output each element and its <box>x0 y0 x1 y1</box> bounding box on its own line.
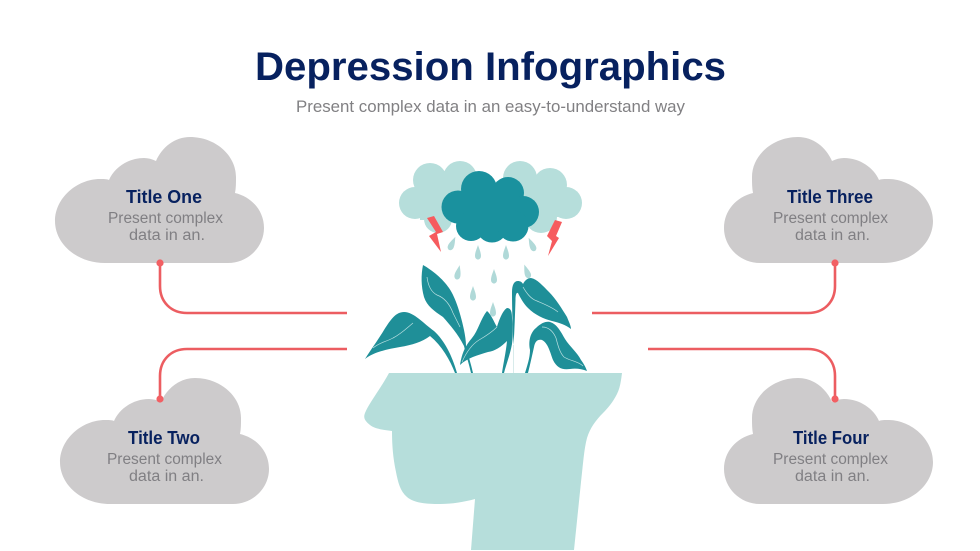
text: Title Two description: Present complex <box>107 451 222 468</box>
panel: Title One cloud <box>55 137 264 263</box>
icon: light storm cloud right <box>503 161 582 233</box>
subtitle: Present complex data in an easy-to-understand way <box>296 97 685 116</box>
text: Title Two description: data in an. <box>129 468 204 485</box>
heading: Title Four: Title Four <box>793 428 869 448</box>
leaf 5 <box>525 322 587 373</box>
icon: light storm cloud left <box>399 161 477 233</box>
title: Depression Infographics <box>255 45 726 89</box>
text: Title Four description <box>773 451 888 485</box>
icon: rain drops <box>446 235 538 317</box>
icon: lightning right <box>547 220 562 256</box>
text: Title Two description <box>107 451 222 485</box>
connector: Title Three <box>592 259 839 313</box>
icon: lightning left <box>427 216 443 252</box>
heading: Title One: Title One <box>126 187 202 207</box>
leaf 3 <box>460 308 513 373</box>
text: Title One description: data in an. <box>129 227 205 244</box>
heading: Title Two: Title Two <box>128 428 200 448</box>
panel: Title Four cloud <box>724 378 933 504</box>
leaf 2 <box>422 265 473 373</box>
heading: Title Three: Title Three <box>787 187 873 207</box>
text: Title Three description: data in an. <box>795 227 870 244</box>
icon: plant leaves <box>365 265 587 373</box>
head silhouette <box>364 373 622 550</box>
text: Title Three description: Present complex <box>773 210 888 227</box>
connector: Title Four <box>648 349 839 403</box>
text: Title Four description: data in an. <box>795 468 870 485</box>
connector: Title Two <box>156 349 347 403</box>
icon: dark storm cloud <box>442 171 539 242</box>
leaf 4 <box>512 278 571 373</box>
panel: Title Three cloud <box>724 137 933 263</box>
panel: Title Two cloud <box>60 378 269 504</box>
leaf 1 <box>365 312 457 373</box>
text: Title One description <box>108 210 223 244</box>
text: Title Three description <box>773 210 888 244</box>
connector: Title One <box>156 259 347 313</box>
text: Title Four description: Present complex <box>773 451 888 468</box>
text: Title One description: Present complex <box>108 210 223 227</box>
